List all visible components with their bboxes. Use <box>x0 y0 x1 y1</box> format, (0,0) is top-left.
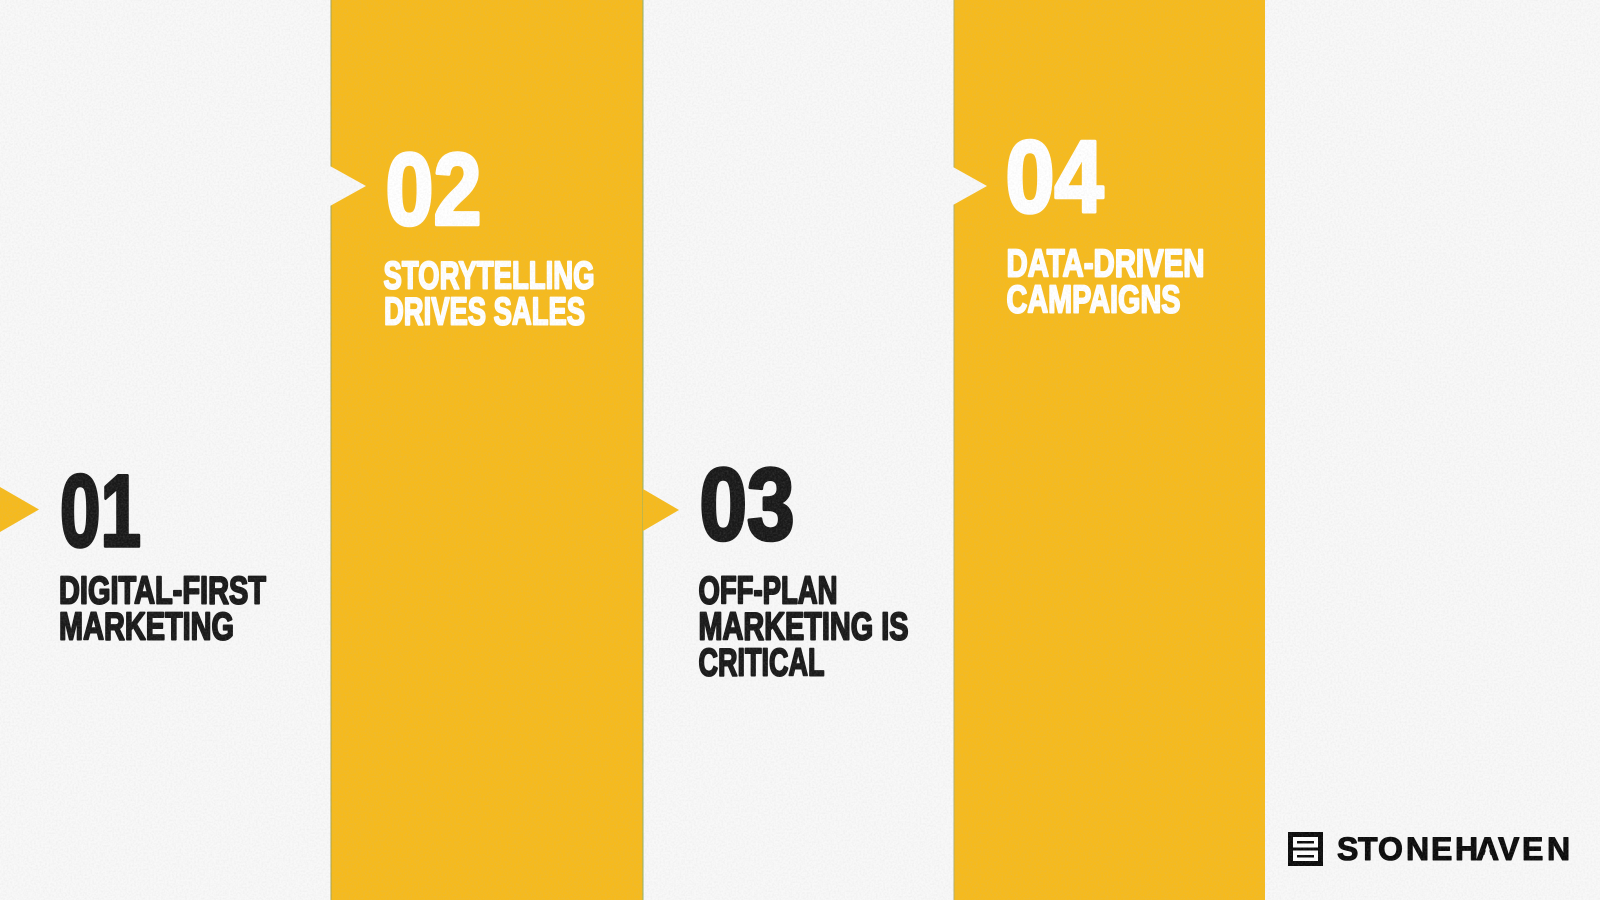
number 02: 02 <box>386 132 482 246</box>
heading: digital-first marketing: DIGITAL-FIRST <box>59 570 266 612</box>
panel: column 2 background <box>331 0 643 900</box>
number 01: 01 <box>60 454 141 568</box>
arrow: column 3 marker <box>643 489 679 531</box>
arrow: column 4 marker <box>953 167 987 205</box>
heading: off-plan marketing is critical: OFF-PLAN <box>698 570 838 612</box>
heading: data-driven campaigns: DATA-DRIVEN <box>1006 242 1204 286</box>
item 04 <box>1006 120 1204 322</box>
heading: data-driven campaigns <box>1006 242 1204 322</box>
heading: storytelling drives sales: DRIVES SALES <box>384 290 585 334</box>
heading: storytelling drives sales: STORYTELLING <box>384 254 594 298</box>
icon: logo mark <box>1288 832 1323 866</box>
item 02 <box>384 132 594 334</box>
heading: digital-first marketing: MARKETING <box>59 606 234 648</box>
arrow: column 1 marker <box>0 487 39 532</box>
heading: storytelling drives sales <box>384 254 594 334</box>
wordmark: STONEHAVEN <box>1337 831 1570 867</box>
number 03: 03 <box>700 448 794 562</box>
arrow: column 2 marker <box>330 166 366 206</box>
heading: off-plan marketing is critical: MARKETING IS <box>698 606 908 648</box>
number 04: 04 <box>1006 120 1104 234</box>
item 03 <box>698 448 908 684</box>
heading: off-plan marketing is critical <box>698 570 908 684</box>
heading: data-driven campaigns: CAMPAIGNS <box>1006 278 1180 322</box>
item 01 <box>59 454 266 648</box>
logo: stonehaven <box>1288 831 1570 867</box>
heading: digital-first marketing <box>59 570 266 648</box>
heading: off-plan marketing is critical: CRITICAL <box>698 642 824 684</box>
panel: column 4 background <box>954 0 1265 900</box>
